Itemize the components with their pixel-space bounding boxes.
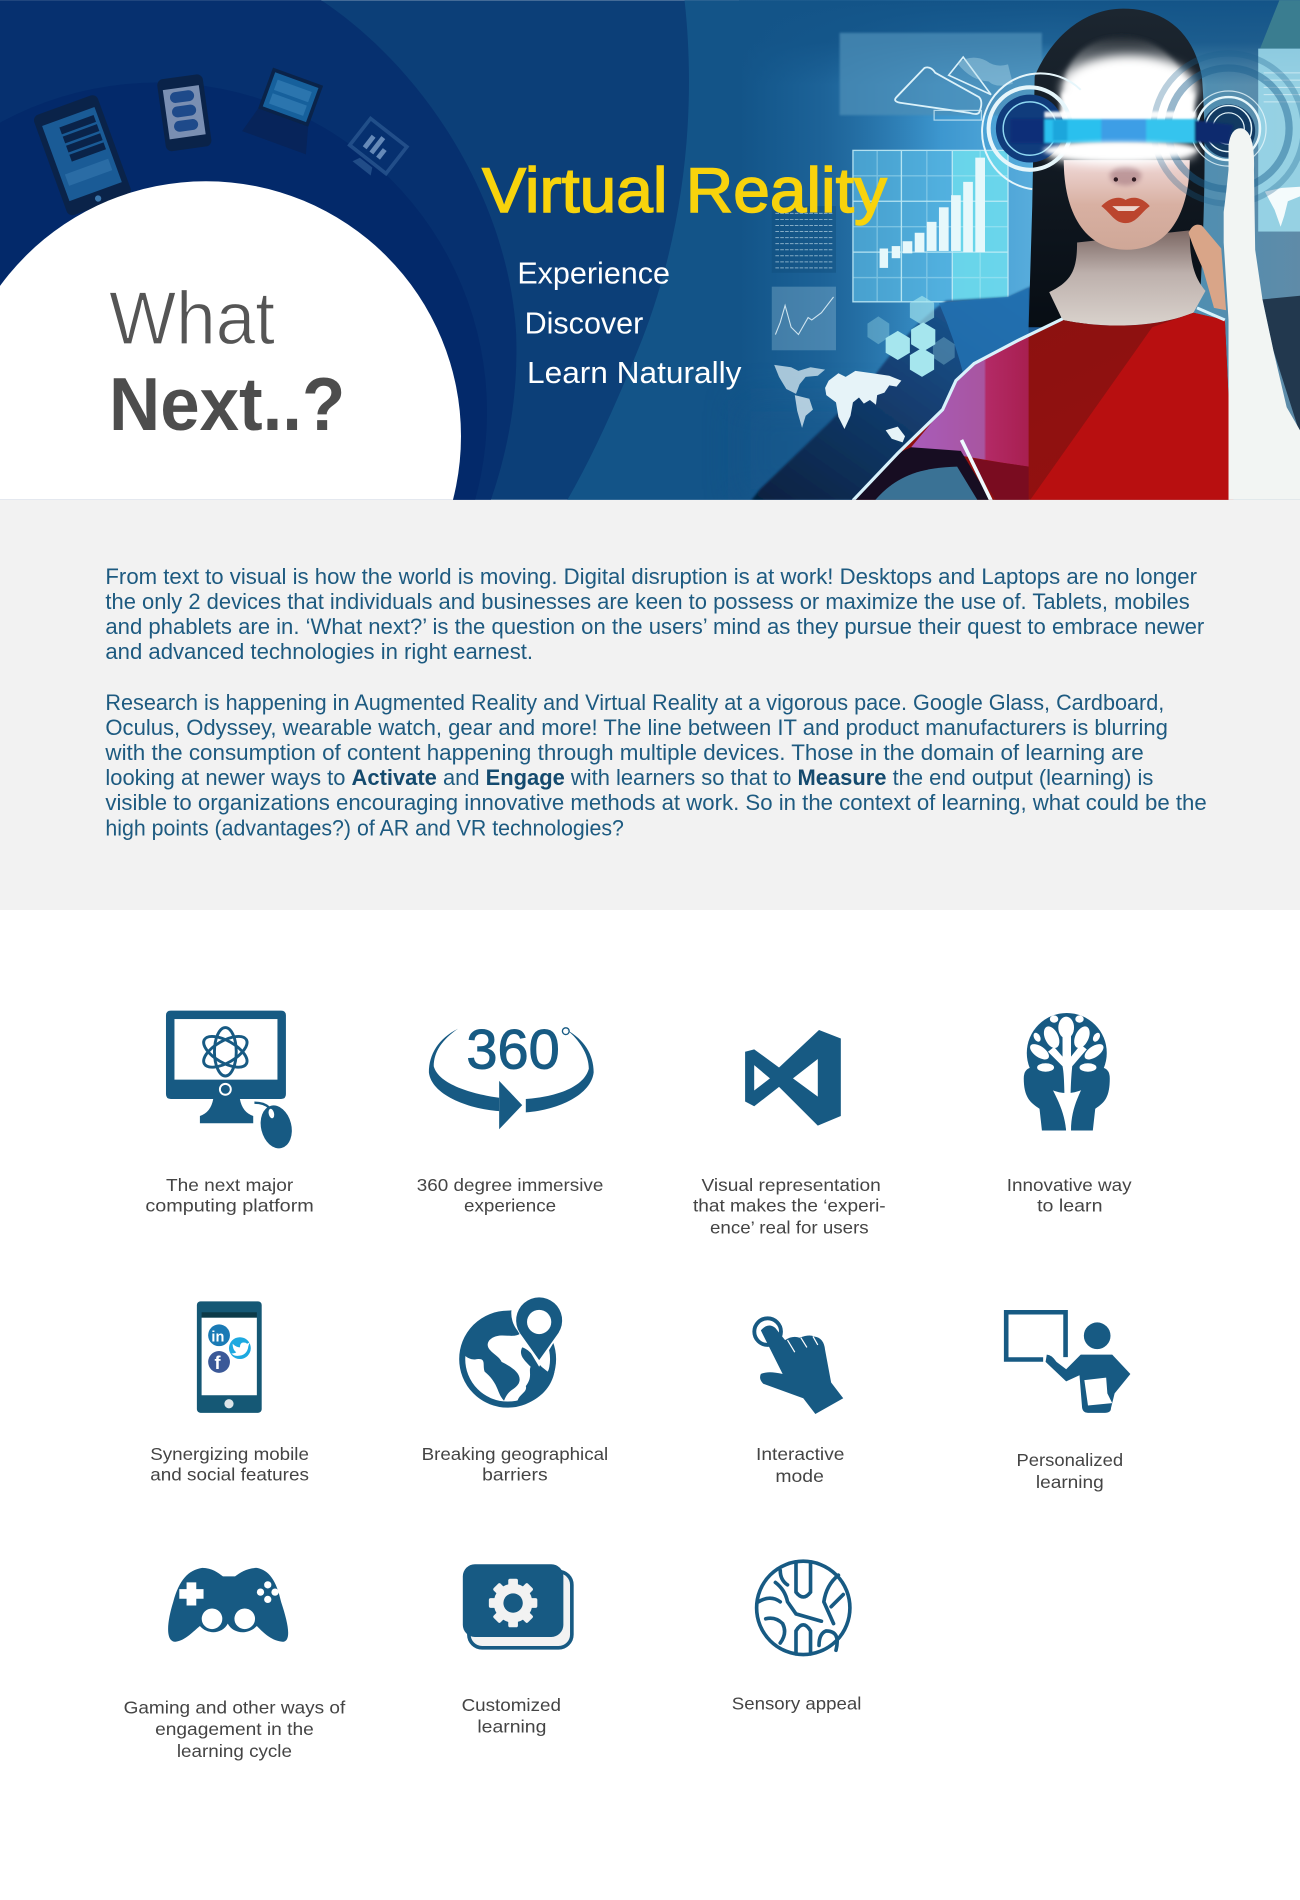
label: Gaming and other ways of	[124, 1697, 345, 1717]
label: engagement in the	[155, 1719, 314, 1739]
white circle	[0, 181, 461, 500]
paragraph 2: visible to organizations encouraging innovative methods at work. So in the context of learning, what could be the	[105, 790, 1207, 815]
item: breaking geographical barriers	[422, 1285, 608, 1485]
label	[693, 1175, 886, 1238]
label: Synergizing mobile	[150, 1444, 309, 1464]
right hologram panel	[1258, 49, 1300, 232]
item: 360 degree experience	[417, 1019, 604, 1216]
label	[422, 1444, 608, 1485]
paragraph 2: high points (advantages?) of AR and VR technologies?	[105, 816, 624, 841]
item: innovative way to learn	[1007, 1013, 1132, 1216]
heading: What Next: What	[109, 276, 275, 360]
hero tagline: Experience	[517, 258, 670, 291]
paragraph 1: and advanced technologies in right earnest.	[105, 639, 533, 664]
label: experience	[464, 1196, 556, 1216]
item: mobile and social	[150, 1301, 309, 1485]
panel: intro text	[0, 500, 1300, 910]
label	[1016, 1450, 1123, 1492]
photo: hexagons	[867, 296, 955, 377]
title: Virtual Reality: Virtual Reality	[482, 156, 887, 226]
label: learning cycle	[177, 1741, 292, 1761]
icon: infinity ribbon	[745, 1030, 841, 1126]
paragraph 1: the only 2 devices that individuals and businesses are keen to possess or maximize the use of. Tablets, mobiles	[105, 589, 1190, 614]
icon: phone with social badges: in	[211, 1329, 224, 1345]
icon: 360 degree arrow: 360	[466, 1019, 560, 1081]
icon: book with gear	[463, 1564, 572, 1648]
icon: tablet device	[32, 94, 132, 217]
label: Customized	[462, 1695, 561, 1715]
label: 360 degree immersive	[417, 1175, 604, 1195]
label: learning	[477, 1717, 546, 1737]
paragraph 2: Research is happening in Augmented Reality and Virtual Reality at a vigorous pace. Google Glass, Cardboard,	[105, 690, 1164, 715]
label	[756, 1444, 845, 1486]
label	[417, 1175, 604, 1216]
icon: brain circuit	[757, 1561, 850, 1655]
hero tagline	[517, 258, 742, 390]
label	[1007, 1175, 1132, 1216]
label: The next major	[166, 1175, 293, 1195]
label: ence’ real for users	[710, 1218, 869, 1238]
paragraph 1	[105, 564, 1205, 664]
item: customized learning	[462, 1564, 572, 1737]
photo background wash	[739, 0, 1300, 501]
label: Sensory appeal	[732, 1694, 861, 1714]
label: Personalized	[1016, 1450, 1123, 1470]
icon: phone device	[156, 74, 212, 152]
label: Interactive	[756, 1444, 845, 1464]
label: Breaking geographical	[422, 1444, 608, 1464]
icon: phone with social badges: f	[214, 1353, 221, 1373]
woman: arm and hand	[1189, 128, 1300, 501]
paragraph 2	[104, 690, 1207, 841]
item: gaming	[124, 1568, 345, 1761]
photo: holographic panels	[772, 33, 1042, 350]
label: and social features	[150, 1465, 309, 1485]
paragraph 1: From text to visual is how the world is moving. Digital disruption is at work! Desktops and Laptops are no longer	[105, 564, 1198, 589]
paragraph 2: looking at newer ways to Activate and Engage with learners so that to Measure the end output (learning) is	[105, 765, 1153, 790]
heading: What Next	[110, 290, 342, 430]
label: barriers	[482, 1465, 548, 1485]
label: Innovative way	[1007, 1175, 1132, 1195]
paragraph 2: Oculus, Odyssey, wearable watch, gear and more! The line between IT and product manufacturers is blurring	[105, 715, 1168, 740]
paragraph 2: with the consumption of content happening through multiple devices. Those in the domain of learning are	[104, 740, 1144, 765]
hero tagline: Discover	[525, 307, 643, 340]
icon: 360 degree arrow	[429, 1019, 594, 1129]
label	[150, 1444, 309, 1485]
label	[124, 1697, 345, 1761]
icon: monitor with atom and mouse	[166, 1011, 296, 1152]
label	[462, 1695, 561, 1737]
label: mode	[775, 1466, 824, 1486]
woman: hair	[1029, 9, 1205, 327]
label: that makes the ‘experi-	[693, 1196, 886, 1216]
item: personalized learning	[1006, 1312, 1130, 1492]
icon: tree head between hands	[1024, 1013, 1110, 1131]
hero banner	[0, 0, 1300, 500]
icon: globe with pin	[462, 1285, 567, 1406]
label: to learn	[1037, 1196, 1103, 1216]
photo: world map	[774, 365, 905, 442]
item: next major computing platform	[145, 1011, 314, 1216]
photo: jacket	[751, 281, 1064, 501]
icon: phone with social badges	[197, 1301, 262, 1413]
label	[145, 1175, 314, 1216]
hero tagline: Learn Naturally	[527, 357, 742, 390]
icon: pointing hand	[754, 1318, 843, 1414]
icon: monitor device	[343, 119, 407, 182]
item: visual representation	[693, 1030, 886, 1238]
woman: visor and rings	[982, 53, 1300, 204]
paragraph 1: and phablets are in. ‘What next?’ is the question on the users’ mind as they pursue their quest to embrace newer	[105, 614, 1205, 639]
woman: red dress	[853, 308, 1233, 501]
label: computing platform	[145, 1196, 314, 1216]
woman: forehead glow	[1046, 56, 1197, 165]
label: learning	[1036, 1472, 1104, 1492]
heading: What Next: Next..?	[109, 362, 345, 446]
item: sensory appeal	[732, 1561, 861, 1714]
icon: presenter at board	[1006, 1312, 1130, 1413]
icon: game controller	[168, 1568, 288, 1642]
label: Visual representation	[701, 1175, 881, 1195]
woman: neck and face	[1049, 36, 1205, 326]
jacket right side	[1262, 296, 1300, 434]
icon: laptop device	[242, 68, 323, 154]
item: interactive mode	[754, 1318, 845, 1486]
